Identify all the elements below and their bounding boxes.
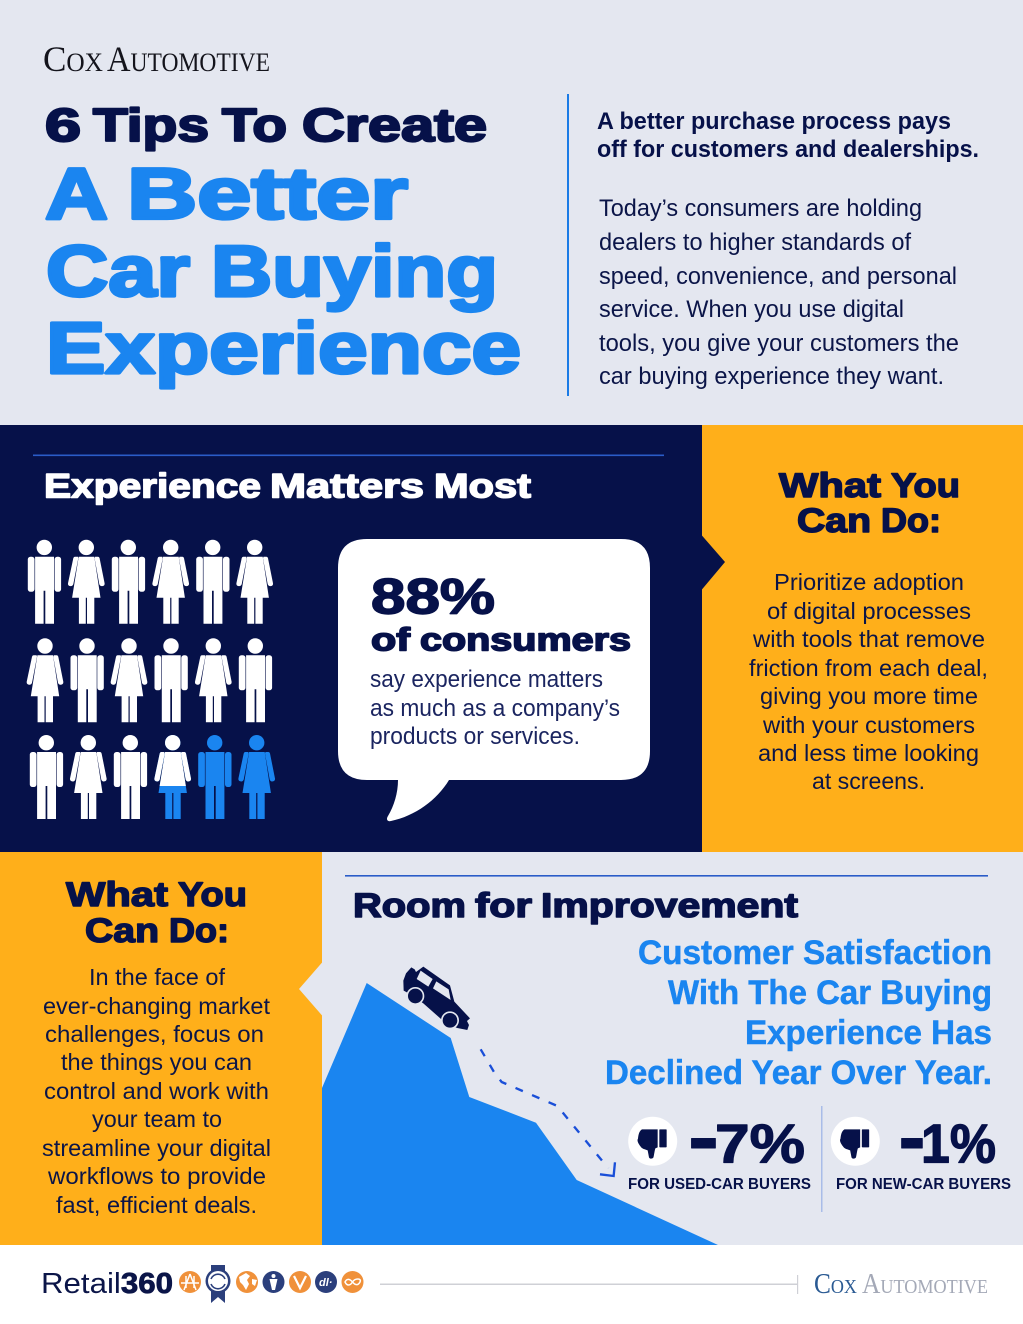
- heading: what you can do: Can: [797, 502, 871, 540]
- intro paragraph: speed, convenience, and personal: [599, 263, 957, 290]
- intro paragraph: tools, you give your customers the: [599, 330, 959, 357]
- stat: used-car buyers: -: [688, 1092, 719, 1181]
- heading: what you can do: Do:: [169, 912, 229, 950]
- panel: what you can do (left): [0, 852, 322, 1245]
- body text: giving you more time: [760, 683, 978, 709]
- stat: used-car buyers: 7%: [715, 1112, 805, 1174]
- intro subheading: [597, 108, 979, 163]
- heading: what you can do: Can: [85, 912, 159, 950]
- title: Buying: [211, 232, 498, 312]
- heading: room for improvement: Room: [353, 887, 466, 925]
- heading: what you can do: You: [891, 467, 960, 505]
- stat: new-car buyers: -: [898, 1092, 926, 1181]
- title: To: [222, 99, 287, 151]
- heading: what you can do: [779, 467, 960, 540]
- body text: streamline your digital: [42, 1135, 271, 1161]
- stat: new-car buyers: [831, 1092, 1011, 1193]
- heading: what you can do: What: [779, 467, 881, 505]
- logo: Retail360: Retail360: [41, 1268, 173, 1300]
- title: [45, 99, 521, 389]
- stat divider: [821, 1106, 822, 1212]
- body text: [749, 569, 988, 794]
- header section: [43, 39, 979, 396]
- heading: room for improvement: Improvement: [541, 887, 798, 925]
- intro subheading: off for customers and dealerships.: [597, 136, 979, 163]
- callout: customer satisfaction: With The Car Buying: [668, 974, 992, 1012]
- body text: [42, 964, 271, 1218]
- arrow: dashed decline: [481, 1049, 615, 1176]
- callout: customer satisfaction: Customer Satisfaction: [638, 934, 992, 972]
- heading: what you can do: What: [66, 876, 168, 914]
- body text: and less time looking: [758, 740, 979, 766]
- stat: used-car buyers: FOR USED-CAR BUYERS: [628, 1176, 811, 1193]
- title: 6: [45, 99, 81, 151]
- logo: Cox Automotive: AUTOMOTIVE: [107, 39, 270, 79]
- body text: of digital processes: [767, 598, 971, 624]
- intro paragraph: dealers to higher standards of: [599, 229, 911, 256]
- speech bubble: 88% of consumers: as much as a company’s: [370, 695, 620, 722]
- body text: at screens.: [812, 768, 925, 794]
- brand icons: [179, 1265, 364, 1303]
- body text: Prioritize adoption: [774, 569, 964, 595]
- heading: experience matters most: Experience: [44, 468, 261, 506]
- footer rule: [380, 1275, 798, 1294]
- heading: room for improvement: [353, 887, 798, 925]
- intro paragraph: car buying experience they want.: [599, 363, 944, 390]
- body text: ever-changing market: [43, 993, 270, 1019]
- footer: [0, 1245, 1023, 1324]
- header divider: [567, 94, 569, 396]
- body text: control and work with: [44, 1078, 269, 1104]
- logo: Cox Automotive: COX: [814, 1269, 857, 1300]
- heading: what you can do: You: [178, 876, 247, 914]
- speech bubble: 88% of consumers: products or services.: [370, 723, 580, 750]
- title: A: [45, 154, 108, 234]
- stat: new-car buyers: FOR NEW-CAR BUYERS: [836, 1176, 1011, 1193]
- heading: experience matters most: [44, 468, 531, 506]
- chart: declining mountain: [322, 983, 718, 1245]
- heading: what you can do: [66, 876, 247, 950]
- body text: fast, efficient deals.: [56, 1192, 257, 1218]
- logo: Cox Automotive: AUTOMOTIVE: [862, 1269, 988, 1300]
- body text: with your customers: [762, 712, 975, 738]
- intro subheading: A better purchase process pays: [597, 108, 951, 135]
- body text: the things you can: [61, 1049, 252, 1075]
- intro paragraph: [599, 195, 959, 390]
- brand icons: dl·: [319, 1277, 332, 1289]
- heading: experience matters most: Matters: [270, 468, 424, 506]
- title: Better: [127, 154, 408, 234]
- panel: room for improvement: [322, 875, 1011, 1245]
- title: Tips: [93, 99, 209, 151]
- stat: used-car buyers: [628, 1092, 811, 1193]
- body text: challenges, focus on: [45, 1021, 264, 1047]
- panel: what you can do (right): [702, 425, 1023, 852]
- body text: friction from each deal,: [749, 655, 988, 681]
- speech bubble: 88% of consumers: consumers: [420, 622, 631, 658]
- pictogram: people: [27, 540, 275, 819]
- body text: workflows to provide: [47, 1163, 266, 1189]
- speech bubble: 88% of consumers: say experience matters: [370, 666, 603, 693]
- stat: new-car buyers: 1%: [921, 1112, 996, 1174]
- speech bubble: 88% of consumers: of: [371, 622, 410, 658]
- speech bubble: 88% of consumers: [338, 539, 650, 821]
- title: Create: [302, 99, 487, 151]
- heading: room for improvement: for: [475, 887, 532, 925]
- body text: with tools that remove: [752, 626, 985, 652]
- title: Experience: [46, 309, 521, 389]
- logo: Cox Automotive: [814, 1269, 988, 1300]
- body text: your team to: [92, 1106, 222, 1132]
- title: Car: [46, 232, 190, 312]
- intro paragraph: service. When you use digital: [599, 296, 904, 323]
- logo: Cox Automotive: COX: [43, 39, 103, 79]
- icon: car on slope: [403, 967, 470, 1030]
- callout: customer satisfaction: [605, 934, 992, 1092]
- speech bubble: 88% of consumers: 88%: [371, 568, 495, 624]
- callout: customer satisfaction: Experience Has: [745, 1014, 992, 1052]
- heading: what you can do: Do:: [881, 502, 941, 540]
- panel: experience matters most: [0, 425, 702, 852]
- logo: Cox Automotive: [43, 39, 270, 79]
- heading: experience matters most: Most: [434, 468, 531, 506]
- intro paragraph: Today’s consumers are holding: [599, 195, 922, 222]
- body text: In the face of: [89, 964, 225, 990]
- callout: customer satisfaction: Declined Year Over Year.: [605, 1054, 992, 1092]
